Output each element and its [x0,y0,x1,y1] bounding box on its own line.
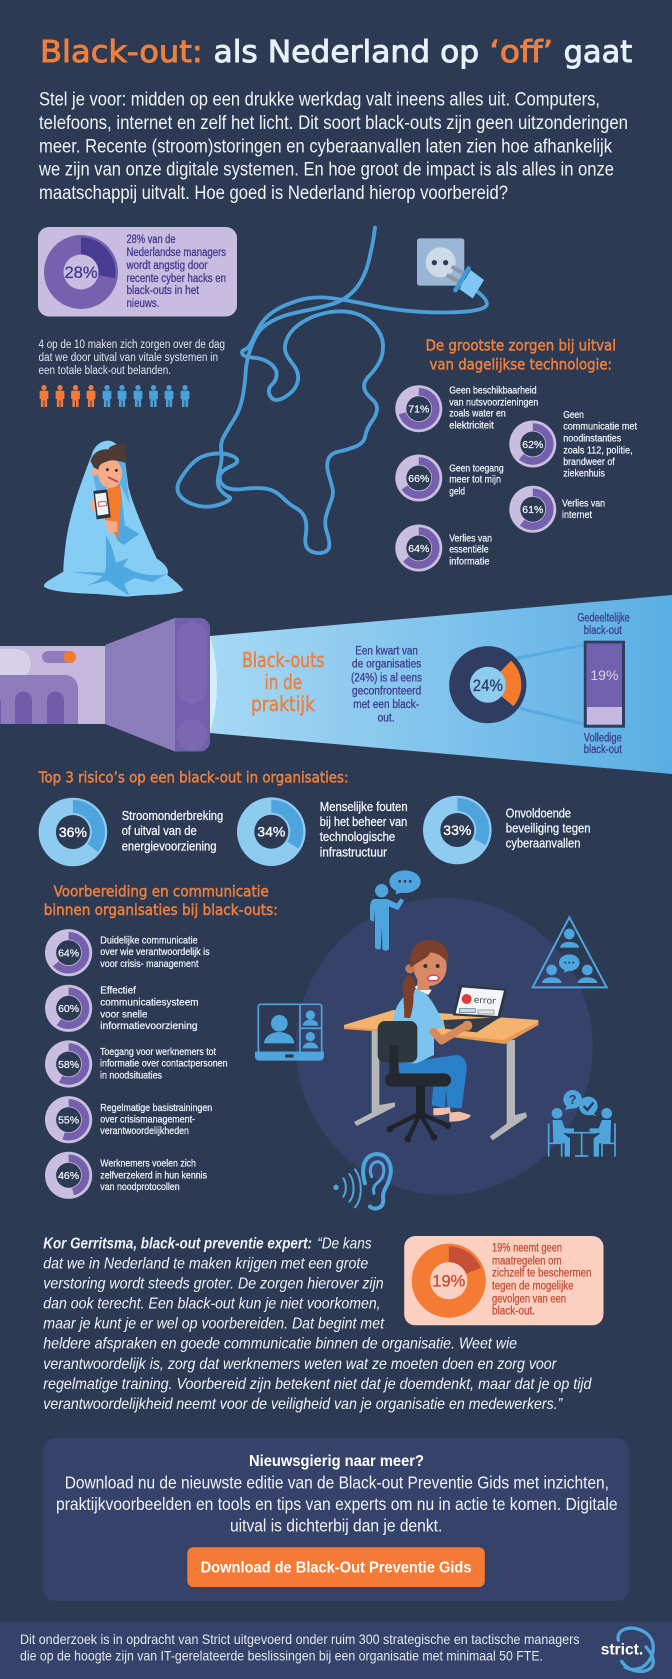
donut: 28%: 28% [64,264,98,282]
preparation: 55%: over crisismanagement- [100,1114,195,1126]
risk: 36%: Stroomonderbreking [122,809,223,823]
preparation: 58%: 58% [58,1059,79,1071]
stat: 62%: Geen [563,409,584,421]
donut: 24%: 24% [473,676,503,695]
text: een kwart van de organisaties: de organisaties [352,659,422,671]
risk: 34%: infrastructuur [320,845,387,859]
risk: 33%: Onvoldoende [506,806,571,820]
panel: call to action [43,1438,629,1601]
heading: grootste zorgen: van dagelijkse technologie: [430,356,612,374]
preparation: 64% [45,929,210,976]
quote: Kor Gerritsma: dat we in Nederland te maken krijgen met een grote [43,1255,368,1272]
risk: 36% [39,798,223,866]
heading: black-outs in de praktijk [242,648,324,716]
icon: meeting with questions: ? [569,1093,577,1107]
heading: black-outs in de praktijk: Black-outs [242,648,324,672]
icon: socket and plug [417,238,484,298]
icon: video call laptop [255,1004,324,1061]
risk: 34%: bij het beheer van [320,815,407,829]
preparation: 46% [45,1152,207,1199]
bar labels [577,613,630,756]
preparation: 46%: Werknemers voelen zich [100,1158,196,1170]
preparation: 64%: 64% [58,948,79,960]
heading: black-outs in de praktijk: praktijk [251,692,315,716]
stat: 61%: 61% [522,504,543,516]
preparation: 55%: Regelmatige basistrainingen [100,1102,212,1114]
footer band [0,1622,672,1679]
intro text [38,90,628,204]
stat: 62%: noodinstanties [563,432,621,444]
stat: 62%: 62% [522,439,543,451]
heading: black-outs in de praktijk: in de [264,670,302,694]
panel text: Nederlandse managers [126,247,226,259]
quote: Kor Gerritsma: heldere afspraken en goede communicatie binnen de organisatie. Weet wie [43,1336,517,1353]
panel text: maatregelen om [492,1255,562,1267]
risk: 36%: energievoorziening [122,839,217,853]
stat: 71%: zoals water en [449,408,506,420]
logo: strict [601,1628,653,1671]
preparation: 46%: 46% [58,1170,79,1182]
preparation: 58%: Toegang voor werknemers tot [100,1046,216,1058]
risk: 34%: technologische [320,830,395,844]
icon row: 10 people [40,385,189,407]
quote: Kor Gerritsma: maar je kunt je er wel op voorbereiden. Dat begint met [43,1316,384,1333]
text: 4 op de 10: een totale black-out belanden. [38,365,171,377]
stat: 66%: Geen toegang [449,462,504,474]
stat: 71% [395,384,538,432]
heading: grootste zorgen: De grootste zorgen bij uitval [426,337,616,355]
stat: 62% [509,409,637,479]
footer text: die op de hoogte zijn van IT-gerelateerde beslissingen bij een organisatie met minimaal 50 FTE. [20,1648,543,1664]
title: gaat [564,35,632,70]
text: een kwart van de organisaties: geconfronteerd [352,686,421,698]
heading: grootste zorgen [426,337,616,374]
risk: 33%: 33% [443,822,471,838]
panel text: tegen de mogelijke [492,1280,574,1292]
quote: Kor Gerritsma: verantwoordelijk is, zorg dat werknemers weten wat ze moeten doen en zorg voor [43,1356,557,1373]
cta text [56,1472,618,1536]
stat: 66%: meer tot mijn [449,474,501,486]
quote: Kor Gerritsma: verantwoordelijkheid neemt voor de veiligheid van je organisatie en medewerkers.” [43,1396,563,1413]
donut: 19%: 19% [432,1273,466,1291]
stat: 62%: brandweer of [563,456,615,468]
cta heading: Nieuwsgierig naar meer? [249,1453,424,1470]
cta text: uitval is dichterbij dan je denkt. [230,1516,442,1536]
risk: 33%: cyberaanvallen [506,837,580,851]
preparation: 58%: in noodsituaties [100,1069,162,1081]
stat: 62%: communicatie met [563,421,637,433]
button: download: Download de Black-Out Preventie Gids [201,1559,472,1576]
preparation: 60%: communicatiesysteem [100,997,199,1009]
stat: 61%: internet [562,509,592,521]
panel text: recente cyber hacks en [126,273,226,285]
cta text: praktijkvoorbeelden en tools en tips van experts om nu in actie te komen. Digitale [56,1494,618,1514]
text: een kwart van de organisaties: (24%) is al eens [351,672,422,684]
donut: 24% [449,646,526,723]
panel text: zichzelf te beschermen [492,1268,592,1280]
button: download [187,1547,485,1587]
stat: 66% [395,454,504,502]
title [40,35,632,70]
panel text: gevolgen van een [492,1293,566,1305]
preparation: 46%: van noodprotocollen [100,1181,180,1193]
bar: gedeeltelijke vs volledige black-out: 19% [590,667,618,683]
illustration: worried man in blanket [44,441,183,597]
light beam [210,595,672,774]
preparation: 55%: 55% [58,1114,79,1126]
preparation: 55% [45,1096,212,1143]
heading: top 3 risico's: Top 3 risico’s op een black-out in organisaties: [38,768,348,786]
stat: 71%: 71% [408,404,429,416]
preparation: 60% [45,985,199,1032]
risk: 36%: 36% [59,824,87,840]
preparation: 64%: Duidelijke communicatie [100,934,198,946]
stat: 66%: 66% [408,473,429,485]
cable shaped as map of the Netherlands [177,228,487,553]
stat: 64% [395,524,492,572]
risk: 34% [237,797,408,866]
illustration: woman at desk with error on laptop [344,940,538,1142]
cta text: Download nu de nieuwste editie van de Black-out Preventie Gids met inzichten, [65,1472,609,1492]
stat: 66%: geld [449,485,465,497]
footer text [20,1631,580,1664]
intro text: maatschappij uitvalt. Hoe goed is Nederland hierop voorbereid? [39,183,508,204]
text: een kwart van de organisaties: met een black- [353,699,419,711]
preparation: 64%: over wie verantwoordelijk is [100,946,210,958]
bar labels: black-out [584,744,622,756]
stat: 71%: van nutsvoorzieningen [449,396,538,408]
text: 4 op de 10 [38,339,225,377]
risk: 36%: of uitval van de [122,824,197,838]
background circle behind office scene [296,898,593,1195]
panel text [492,1242,592,1318]
title: Black-out: [40,35,203,70]
quote: Kor Gerritsma: regelmatige training. Voorbereid zijn betekent niet dat je doemdenkt, maar dat je op tijd [43,1376,592,1393]
icon: team triangle [533,917,607,987]
icon: meeting with questions [549,1090,615,1157]
panel text: wordt angstig door [126,260,208,272]
risk: 33%: beveiliging tegen [506,821,591,835]
risk: 34%: Menselijke fouten [320,800,408,814]
panel text: 28% van de [126,234,176,246]
text: 4 op de 10: dat we door uitval van vitale systemen in [38,352,218,364]
heading: voorbereiding en communicatie: Voorbereiding en communicatie [54,882,269,900]
quote: Kor Gerritsma: dan ook terecht. Een black-out kun je niet voorkomen, [43,1296,381,1313]
stat: 64%: essentiële [449,544,489,556]
preparation: 64%: voor crisis- management [100,958,199,970]
quote: Kor Gerritsma: Kor Gerritsma, black-out preventie expert: [43,1235,312,1252]
risk: 34%: 34% [257,824,285,840]
icon: speaking person [370,870,421,951]
donut: 28% [44,235,118,309]
panel text: nieuws. [126,298,160,310]
stat: 71%: elektriciteit [449,420,494,432]
title: als Nederland op [214,35,479,70]
illustration: flashlight [0,618,210,752]
text: een kwart van de organisaties [351,645,422,725]
stat: 62%: zoals 112, politie, [563,444,633,456]
stat: 62%: ziekenhuis [563,467,605,479]
risk: 33% [423,796,591,864]
connector lines [516,645,584,724]
preparation: 60%: voor snelle [100,1008,148,1020]
bar labels: Volledige [584,733,622,745]
text: 4 op de 10: 4 op de 10 maken zich zorgen over de dag [38,339,225,351]
footer text: Dit onderzoek is in opdracht van Strict uitgevoerd onder ruim 300 strategische en tactische managers [20,1631,580,1647]
icon: listening ear [333,1154,391,1209]
preparation: 46%: zelfverzekerd in hun kennis [100,1169,207,1181]
panel text: 19% neemt geen [492,1242,562,1254]
stat: 64%: Verlies van [449,532,492,544]
stat: 61% [509,486,605,533]
preparation: 58%: informatie over contactpersonen [100,1058,228,1070]
stat: 71%: Geen beschikbaarheid [449,384,537,396]
quote: Kor Gerritsma [43,1235,592,1413]
quote: Kor Gerritsma: “De kans [317,1235,372,1252]
panel text [126,234,226,310]
heading: voorbereiding en communicatie [44,882,278,919]
logo: strict: strict. [601,1641,643,1658]
bar labels: Gedeeltelijke [577,613,630,625]
panel: 28% managers [38,227,237,316]
donut: 19% [412,1244,486,1318]
illustration: woman at desk with error on laptop: error [474,996,496,1007]
stat: 64%: 64% [408,543,429,555]
stat: 64%: informatie [449,555,490,567]
panel: 19% no measures [404,1236,604,1325]
preparation: 60%: 60% [58,1003,79,1015]
text: een kwart van de organisaties: out. [378,713,395,725]
bar labels: black-out [584,625,622,637]
preparation: 55%: verantwoordelijkheden [100,1125,189,1137]
quote: Kor Gerritsma: verstoring wordt steeds groter. De zorgen hierover zijn [43,1276,384,1293]
stat: 61%: Verlies van [562,498,605,510]
panel text: black-out. [492,1306,535,1318]
bar: gedeeltelijke vs volledige black-out [577,613,630,756]
intro text: Stel je voor: midden op een drukke werkdag valt ineens alles uit. Computers, [39,90,600,111]
text: een kwart van de organisaties: Een kwart van [355,645,418,657]
preparation: 60%: Effectief [100,985,136,997]
panel text: black-outs in het [126,285,200,297]
preparation: 58% [45,1040,228,1088]
title: ‘off’ [490,35,553,70]
heading: voorbereiding en communicatie: binnen organisaties bij black-outs: [44,901,278,919]
preparation: 60%: informatievoorziening [100,1020,198,1032]
